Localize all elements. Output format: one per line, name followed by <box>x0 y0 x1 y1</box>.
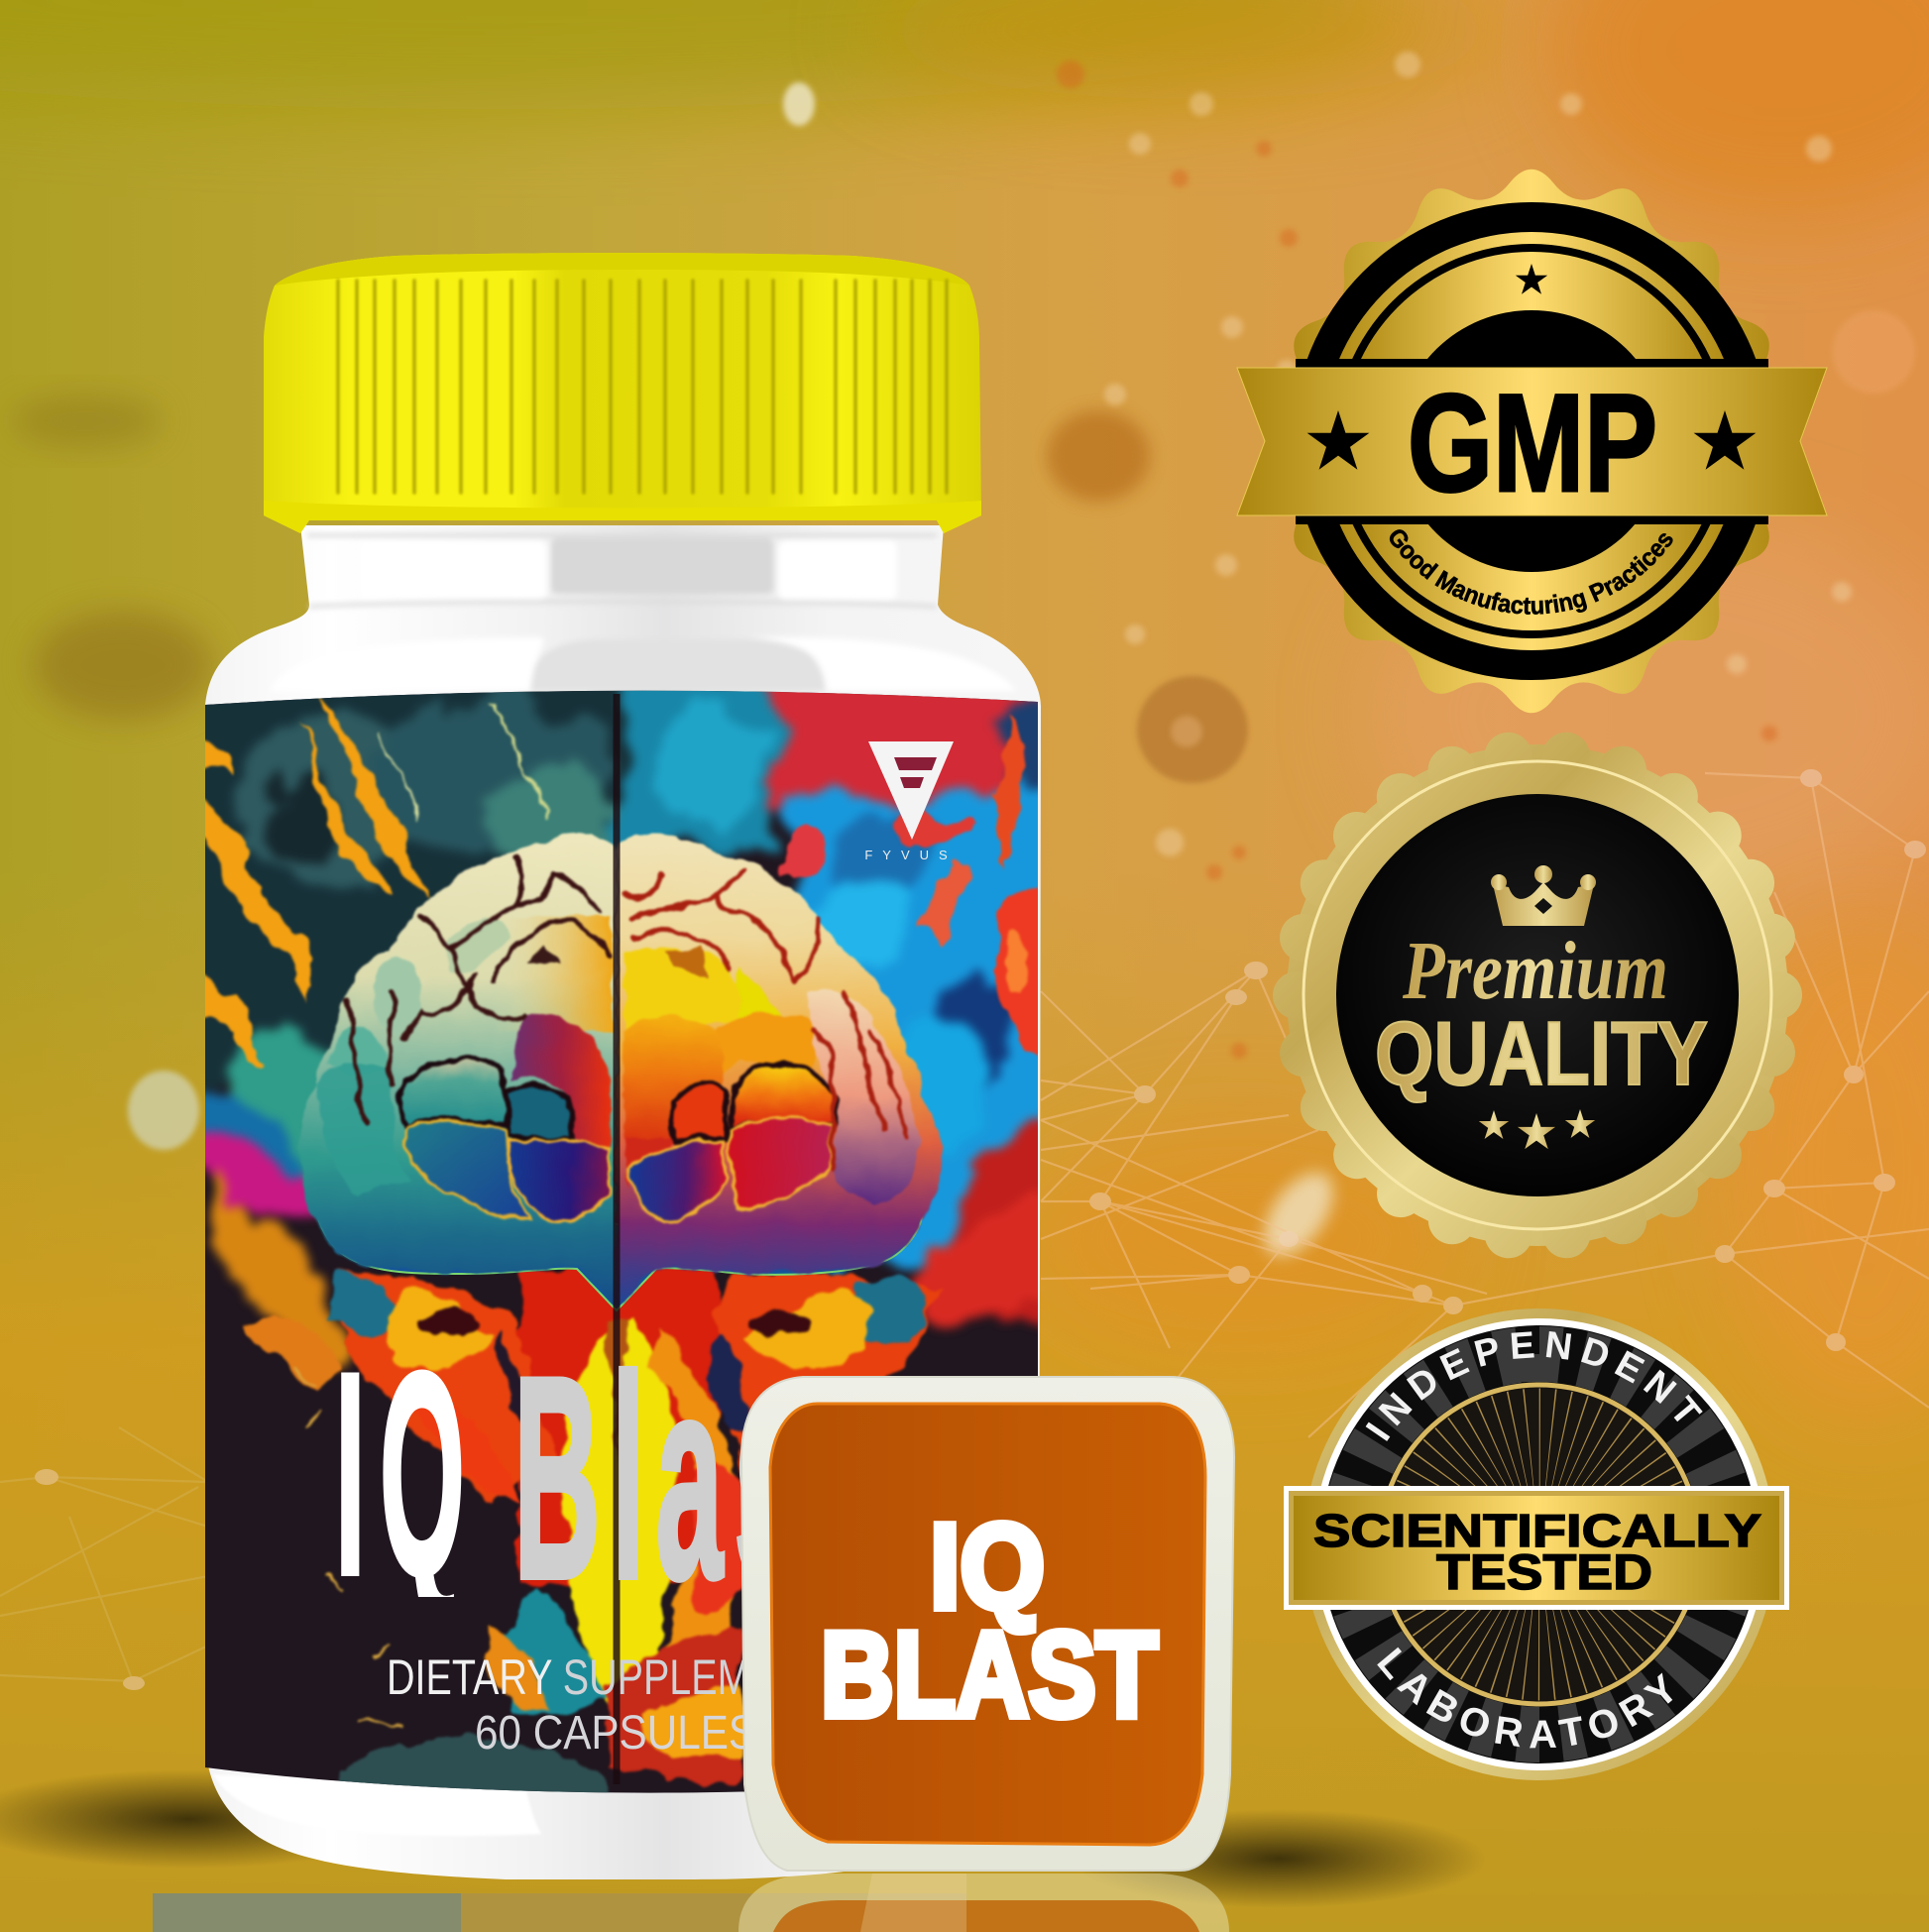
lab seal: ribbon <box>1284 1486 1789 1610</box>
lab seal: gold rim <box>1304 1308 1775 1780</box>
GMP: black and gold rings <box>1293 202 1770 680</box>
lab seal: TESTED: TESTED <box>1436 1544 1652 1600</box>
badge text: IQ: IQ <box>930 1499 1045 1634</box>
label artwork <box>205 690 1038 1793</box>
GMP: top star <box>1516 264 1547 294</box>
icon: crown <box>1491 865 1596 926</box>
product name: IQ Blast: Blast <box>513 1318 862 1640</box>
label: central fire under the brain <box>243 1267 942 1814</box>
brain: central fissure <box>613 694 621 1784</box>
lab seal: white and black band <box>1313 1318 1765 1770</box>
premium: QUALITY: QUALITY <box>1375 1004 1708 1104</box>
lab seal: sunburst centre <box>1380 1385 1699 1704</box>
premium: three stars <box>1479 1109 1595 1149</box>
bottle cap <box>264 253 981 533</box>
label: brain illustration <box>299 694 941 1784</box>
GMP: ribbon <box>1237 368 1827 515</box>
brain: left hemisphere <box>299 834 617 1310</box>
logo: FYVUS <box>864 741 958 862</box>
lab seal: INDEPENDENT: INDEPENDENT <box>1366 1331 1703 1441</box>
GMP seal <box>1236 169 1828 714</box>
product name: IQ Blast: IQ <box>335 1313 479 1635</box>
bottle base highlight <box>213 1774 541 1836</box>
Scientifically Tested seal <box>1284 1308 1789 1780</box>
brain: right hemisphere <box>617 834 941 1310</box>
GMP: heading: GMP <box>1408 365 1657 520</box>
bottle neck highlights <box>270 535 1016 691</box>
GMP: scalloped gold edge <box>1276 170 1787 713</box>
label text: dietary supplement: DIETARY SUPPLEMENT <box>387 1649 828 1705</box>
bottle body <box>205 525 1041 1879</box>
lab seal: LABORATORY: LABORATORY <box>1377 1648 1673 1749</box>
pill box badge: IQ BLAST <box>741 1377 1234 1871</box>
logo: FYVUS: FYVUS <box>864 848 958 862</box>
premium: black centre <box>1336 794 1739 1196</box>
lab seal: SCIENTIFICALLY: SCIENTIFICALLY <box>1313 1505 1761 1556</box>
premium: gold ring <box>1304 761 1771 1229</box>
GMP: curved tagline: Good Manufacturing Practices <box>1390 529 1673 615</box>
premium: script word: Premium <box>1402 925 1668 1017</box>
label: coloured smoke background <box>205 690 1038 1376</box>
label: lightning flames and red splashes <box>193 699 1055 1071</box>
brain: cerebellum and lower lobes <box>317 1214 922 1310</box>
floor shadow and reflection <box>0 1769 1487 1932</box>
background: network lines and nodes <box>0 769 1929 1690</box>
GMP: right ribbon star <box>1694 410 1756 470</box>
premium: scalloped gold edge <box>1287 744 1788 1246</box>
label text: 60 capsules: 60 CAPSULES <box>475 1705 756 1760</box>
badge text: BLAST: BLAST <box>821 1607 1158 1742</box>
product name: IQ Blast <box>341 1366 741 1597</box>
product bottle <box>178 253 1080 1879</box>
GMP: left ribbon star <box>1307 410 1369 470</box>
Premium Quality seal <box>1287 744 1788 1246</box>
